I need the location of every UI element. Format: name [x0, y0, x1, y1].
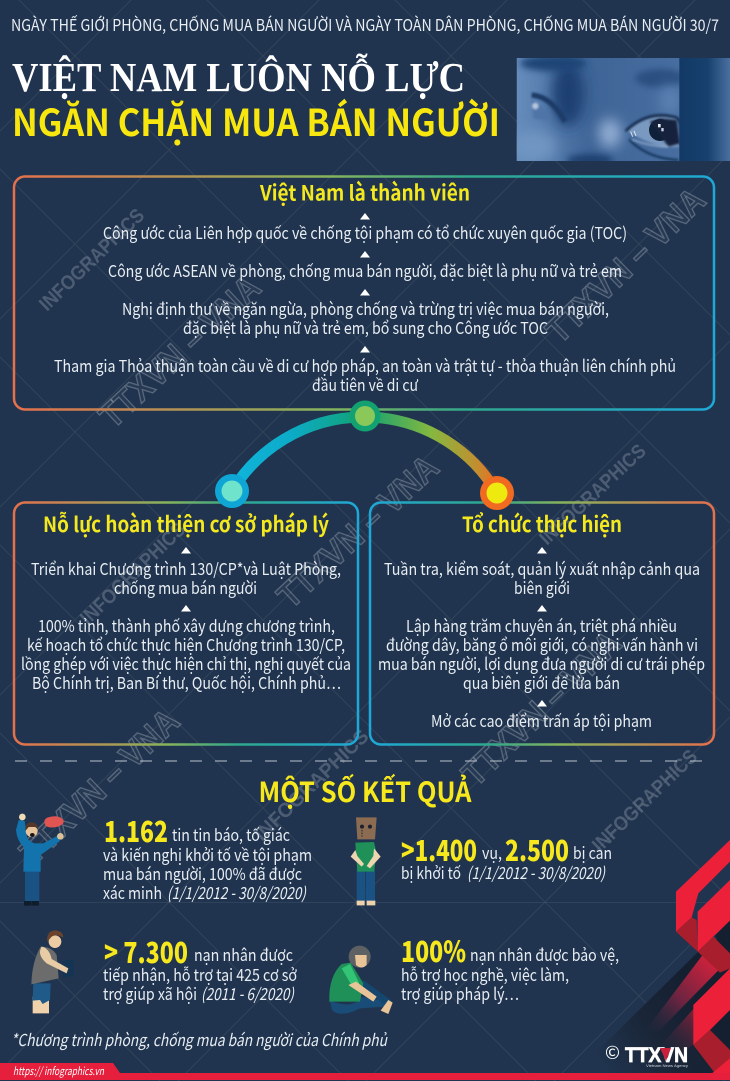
stat: > 7.300 victims: nạn nhân được — [194, 942, 293, 966]
icon: shouting man — [16, 814, 64, 906]
stat: >1.400 cases: (1/1/2012 - 30/8/2020) — [467, 860, 606, 884]
stat: 1.162 — [103, 809, 312, 904]
watermarks: INFOGRAPHICS — [250, 726, 373, 846]
stat: > 7.300 victims: tiếp nhận, hỗ trợ tại 425 cơ sở — [103, 962, 297, 986]
footnote: *Chương trình phòng, chống mua bán người của Chính phủ — [11, 1027, 388, 1051]
list: legal efforts: lồng ghép với việc thực hiện chỉ thị, nghị quyết của — [21, 651, 351, 675]
stat: >1.400 cases: vụ, — [482, 840, 502, 864]
list: implementation actions: qua biên giới để lừa bán — [463, 670, 620, 694]
watermarks: TTXVN – VNA — [538, 180, 713, 351]
stat: > 7.300 victims: (2011 - 6/2020) — [201, 981, 295, 1005]
stat: > 7.300 victims: > 7.300 — [104, 930, 188, 972]
title: NGĂN CHẶN MUA BÁN NGƯỜI — [12, 93, 500, 147]
footer bar with url — [0, 1063, 730, 1080]
stat: 1.162: (1/1/2012 - 30/8/2020) — [167, 880, 307, 904]
list: conventions: đầu tiên về di cư — [312, 372, 419, 396]
list: legal efforts — [21, 547, 351, 694]
icon: sitting boy — [329, 946, 393, 1014]
stat: 100% victims protected: 100% — [401, 929, 466, 971]
watermarks: TTXVN – VNA — [270, 448, 446, 616]
heading: member of: Việt Nam là thành viên — [259, 178, 470, 208]
stat: 100% victims protected — [401, 929, 619, 1005]
list: implementation actions — [378, 547, 705, 732]
watermarks: TTXVN – VNA — [92, 268, 268, 436]
stat: 1.162: xác minh — [103, 880, 162, 904]
list: implementation actions: Mở các cao điểm trấn áp tội phạm — [431, 708, 652, 732]
panel: Nỗ lực hoàn thiện cơ sở pháp lý — [14, 502, 358, 744]
list: conventions: đặc biệt là phụ nữ và trẻ em, bổ sung cho Công ước TOC — [183, 315, 548, 339]
list: implementation actions: biên giới — [514, 575, 570, 599]
decorative red ribbon corner — [575, 840, 730, 1077]
logo: TTXVN — [605, 1039, 688, 1068]
icon: man with paper bag on head — [351, 817, 381, 905]
connector arc with nodes — [215, 400, 514, 510]
stat: > 7.300 victims: trợ giúp xã hội — [103, 981, 197, 1005]
stat: >1.400 cases: bị can — [573, 840, 612, 864]
list: conventions: Công ước ASEAN về phòng, chống mua bán người, đặc biệt là phụ nữ và trẻ em — [108, 258, 622, 282]
stat: 1.162: mua bán người, 100% đã được — [103, 861, 302, 885]
photo: close-up of eyes — [510, 55, 730, 166]
icon: child with book — [31, 930, 74, 1013]
stat: >1.400 cases: >1.400 — [401, 828, 477, 870]
logo: TTXVN: © — [605, 1039, 620, 1065]
watermarks: INFOGRAPHICS — [76, 519, 190, 630]
results heading: MỘT SỐ KẾT QUẢ — [258, 771, 472, 811]
list: legal efforts: Triển khai Chương trình 130/CP*và Luật Phòng, — [31, 556, 341, 580]
list: conventions — [54, 213, 676, 396]
stat: >1.400 cases: bị khởi tố — [401, 860, 461, 884]
logo: TTXVN: Vietnam News Agency — [646, 1063, 688, 1068]
stat: >1.400 cases: 2.500 — [505, 828, 569, 870]
heading: legal framework: Nỗ lực hoàn thiện cơ sở pháp lý — [43, 509, 329, 539]
heading: implementation: Tổ chức thực hiện — [462, 509, 622, 539]
list: implementation actions: Lập hàng trăm chuyên án, triệt phá nhiều — [406, 613, 677, 637]
watermarks: INFOGRAPHICS — [588, 746, 702, 857]
stat: 100% victims protected: trợ giúp pháp lý… — [401, 981, 519, 1005]
logo: TTXVN: TTXVN — [625, 1044, 688, 1067]
list: conventions: Nghị định thư về ngăn ngừa, phòng chống và trừng trị việc mua bán người, — [122, 296, 609, 320]
title — [12, 54, 500, 147]
stat: 1.162: tin tin báo, tố giác — [172, 822, 290, 846]
watermarks: INFOGRAPHICS — [535, 440, 651, 550]
stat: 100% victims protected: nạn nhân được bảo vệ, — [470, 942, 619, 966]
title: VIỆT NAM LUÔN NỖ LỰC — [12, 54, 465, 100]
panel: Việt Nam là thành viên — [14, 176, 714, 410]
watermarks: INFOGRAPHICS — [35, 205, 149, 316]
stat: 100% victims protected: hỗ trợ học nghề, việc làm, — [401, 962, 569, 986]
stat: >1.400 cases — [401, 828, 612, 884]
list: legal efforts: 100% tỉnh, thành phố xây dựng chương trình, — [38, 613, 335, 637]
list: conventions: Công ước của Liên hợp quốc về chống tội phạm có tổ chức xuyên quốc gia (TOC) — [103, 220, 627, 244]
list: legal efforts: kế hoạch tổ chức thực hiện Chương trình 130/CP, — [27, 632, 345, 656]
list: legal efforts: chống mua bán người — [114, 575, 257, 599]
panel: Tổ chức thực hiện — [370, 502, 714, 744]
stat: > 7.300 victims — [103, 930, 297, 1005]
watermarks — [12, 180, 713, 872]
watermarks: TTXVN – VNA — [12, 701, 187, 872]
watermarks: TTXVN – VNA — [454, 623, 629, 794]
footer bar with url: https:// infographics.vn — [13, 1063, 105, 1079]
stat: 1.162: và kiến nghị khởi tố về tội phạm — [103, 842, 312, 866]
stat: 1.162: 1.162 — [104, 809, 168, 851]
list: legal efforts: Bộ Chính trị, Ban Bí thư, Quốc hội, Chính phủ… — [32, 670, 341, 694]
